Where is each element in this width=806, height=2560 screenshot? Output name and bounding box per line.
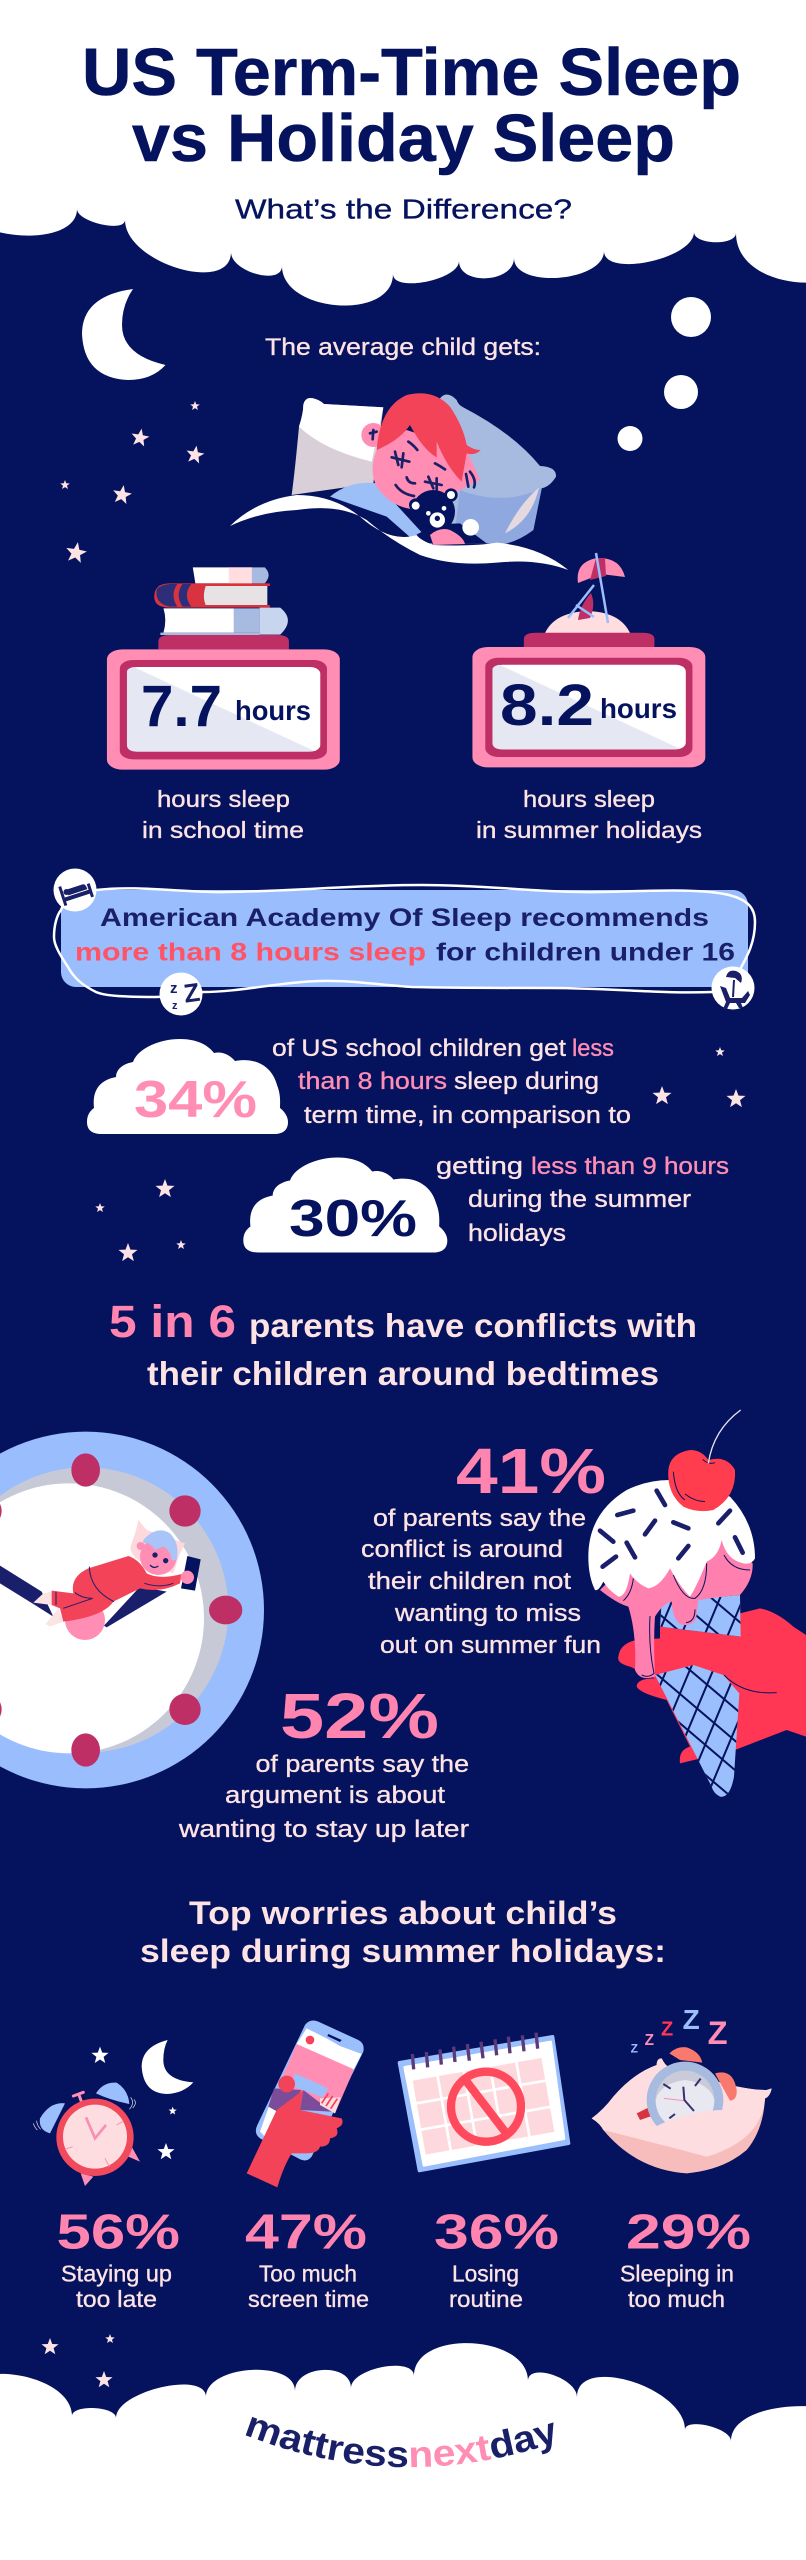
heading: top worries [140,1895,666,1969]
caption: school time: in school time [142,817,304,843]
stat: sleeping in too much: 29% [626,2206,751,2260]
pillow front [610,2098,765,2157]
right pillow [440,395,556,543]
right clock: summer holidays [472,633,705,767]
cloud: 30% [243,1158,447,1252]
clock face [0,1432,264,1788]
stat: 52%: 52% [280,1680,439,1752]
blanket [230,495,568,570]
text: summer statistic: during the summer [468,1186,691,1213]
stat: losing routine: Losing [452,2260,519,2286]
banner text: more than 8 hours sleep [75,938,426,966]
left pillow [292,398,383,495]
clock face [647,2062,723,2138]
icon: crescent moon [82,289,166,380]
calendar cells [413,2058,554,2155]
clock reading: 7.7 hours [141,674,311,739]
stars left of child [60,401,206,564]
text: summer statistic [436,1153,729,1247]
cone [589,1543,806,1840]
heading: 5 in 6 parents [109,1296,697,1392]
stat: 52%: wanting to stay up later [178,1816,469,1843]
prohibition sign [451,2072,521,2142]
alarm clock [33,2083,140,2186]
clock reading: 7.7 hours: 7.7 [141,674,222,739]
top cloud [0,0,806,306]
stat: 41%: out on summer fun [380,1632,601,1659]
clock reading: 7.7 hours: hours [235,695,311,726]
text: term time statistic: of US school children get [272,1035,566,1062]
recommendation banner [54,868,755,1016]
sleeping Zs: Z [708,2014,728,2051]
stat: too much screen time: 47% [245,2206,367,2260]
illustration: ice cream in hand [588,1410,806,1840]
stat: 41% [361,1435,606,1659]
heading: top worries: Top worries about child’s [189,1895,617,1931]
stat: losing routine: 36% [434,2206,559,2260]
text: term time statistic [272,1035,631,1129]
hand [618,1608,806,1763]
cloud: 34% [87,1039,288,1134]
sleeping Zs: Z [661,2019,673,2041]
stat: sleeping in too much: Sleeping in [620,2260,734,2286]
clock reading: 8.2 hours: 8.2 [500,673,594,738]
stat: 41%: of parents say the [373,1505,586,1532]
spiral rings [412,2033,538,2069]
icon: alarm clock with moon and stars [33,2040,193,2186]
stat: 41%: conflict is around [361,1536,563,1563]
illustration: wall clock with child on hands [0,1432,264,1788]
heading: top worries: sleep during summer holidays: [140,1933,666,1969]
title [82,35,741,176]
pyjama top [330,483,433,545]
stat: 52%: argument is about [225,1782,445,1809]
cherry [668,1410,741,1511]
banner wavy outline [54,885,755,997]
sleeping Zs: Z [645,2032,654,2049]
stat: sleeping in too much: too much [628,2286,725,2312]
text: summer statistic: less than 9 hours [531,1153,729,1180]
banner text: American Academy Of Sleep recommends [100,904,709,932]
subtitle: What’s the Difference? [235,194,572,224]
caption: summer holidays [476,786,702,843]
icon: beach umbrella [545,553,630,633]
icon: bed [54,868,96,912]
stat: 41%: 41% [456,1435,606,1507]
child on clock hands [33,1520,201,1627]
banner background [61,890,748,987]
facial features [370,430,475,496]
hair [377,393,481,482]
caption: summer holidays: hours sleep [523,786,655,812]
thought bubbles [618,297,711,451]
text: term time statistic: less [572,1035,614,1062]
title: vs Holiday Sleep [132,101,675,176]
icon: zzz [160,972,202,1016]
stat: staying up too late: too late [76,2286,157,2312]
clock reading: 8.2 hours [500,673,677,738]
hour markers [0,1453,242,1767]
books [154,567,288,635]
drip lines [623,1555,750,1676]
icon: calendar with prohibition sign [399,2033,569,2171]
moon and stars [91,2040,193,2159]
caption: school time [142,786,304,843]
logo arc guide [243,2434,562,2467]
sleeping Zs: Z [683,2004,700,2035]
text: term time statistic: than 8 hours [298,1068,447,1095]
cloud: 30%: 30% [289,1190,417,1248]
clock casing [158,635,289,649]
stat: losing routine [434,2206,559,2312]
stat: sleeping in too much [620,2206,751,2312]
stat: staying up too late: 56% [56,2206,180,2260]
icon: phone in hand [247,2021,364,2187]
stat: losing routine: routine [449,2286,523,2312]
teddy bear [409,488,487,545]
stat: 41%: their children not [368,1568,571,1595]
clock reading: 8.2 hours: hours [600,693,677,724]
icon: zzz: z [172,1000,178,1012]
stat: too much screen time: screen time [248,2286,369,2312]
stars around statistics [95,1047,746,1261]
icon: zzz: z [170,980,178,997]
stat: 52% [178,1680,469,1843]
intro text: The average child gets: [265,334,541,361]
banner text [75,904,735,966]
text: summer statistic: holidays [468,1220,566,1247]
stat: staying up too late: Staying up [61,2260,172,2286]
stat: 52%: of parents say the [256,1751,469,1778]
icon: beach chair [712,966,754,1010]
caption: school time: hours sleep [157,786,290,812]
pillow back [592,2058,772,2173]
text: term time statistic: sleep during [454,1068,599,1095]
sleeping Zs [631,2004,728,2056]
stat: too much screen time: Too much [259,2260,357,2286]
icon: clock under pillow with Zs [592,2004,772,2173]
illustration: sleeping child [230,393,568,570]
melting ice cream [600,1540,753,1678]
sprinkles [600,1491,743,1567]
clock hands [0,1566,167,1640]
caption: summer holidays: in summer holidays [476,817,702,843]
clock bells [669,2047,737,2101]
text: summer statistic: getting [436,1153,523,1180]
heading: 5 in 6 parents: their children around bedtimes [147,1355,659,1392]
stat: 41%: wanting to miss [394,1600,581,1627]
stat: too much screen time [245,2206,369,2312]
icon: zzz: Z [182,977,202,1009]
face [372,430,480,509]
sleeping Zs: Z [631,2042,638,2056]
cloud: 34%: 34% [134,1071,257,1129]
text: term time statistic: term time, in comparison to [304,1102,631,1129]
heading: 5 in 6 parents: parents have conflicts with [249,1307,697,1344]
heading: 5 in 6 parents: 5 in 6 [109,1296,236,1347]
bottom stars [41,2334,115,2387]
stat: staying up too late [56,2206,180,2312]
title: US Term-Time Sleep [82,35,741,110]
scoop icing [588,1480,755,1597]
logo text: mattressnextday [246,2416,554,2468]
left clock: school time [107,567,340,770]
bottom cloud [0,2343,806,2560]
ear [361,423,385,447]
banner text: for children under 16 [436,938,735,966]
